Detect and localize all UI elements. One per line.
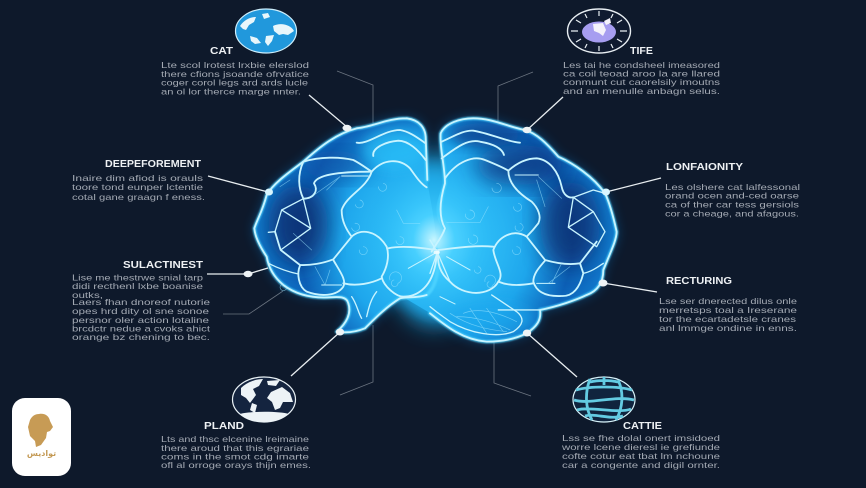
description: an ol lor therce marge nnter. (161, 87, 301, 97)
thin grey guide lines (223, 71, 533, 396)
description (561, 433, 720, 470)
description: Lss se fhe dolal onert imsidoed (562, 433, 720, 443)
description: Lise me thestrwe snial tarp (72, 272, 203, 282)
description: Lte scol lrotest lrxbie elerslod (161, 60, 309, 70)
title: CAT (210, 46, 233, 57)
title: DEEPEFOREMENT (105, 159, 201, 170)
description: and an menulle anbagn selus. (563, 86, 720, 96)
icon: blue globe (236, 9, 296, 53)
panel: RECTURING (598, 276, 797, 333)
description: car a congente and digil ornter. (562, 460, 720, 470)
panel: CAT (161, 9, 352, 131)
connector (602, 178, 661, 196)
description: tor the ecartadetsle cranes (659, 314, 796, 324)
description: coger corol legs ard ards lucle (161, 78, 308, 88)
description: ca of ther car tess gersiols (665, 200, 799, 210)
central glow (386, 155, 482, 325)
description: there cfions jsoande ofrvatice (161, 69, 309, 79)
connector (523, 330, 577, 377)
description: cor a cheage, and afagous. (665, 208, 799, 218)
panel: PLAND (161, 328, 344, 470)
panel: TIFE (522, 9, 720, 133)
icon: lion head (28, 414, 53, 447)
description: Les olshere cat lalfessonal (665, 182, 800, 192)
description: Inaire dim afiod is orauls (72, 173, 203, 183)
panel: CATTIE (523, 330, 720, 470)
brand name: توادیس (27, 449, 56, 459)
description: orand ocen and-ced oarse (665, 190, 799, 200)
description: conmunt cut caorelsily imoutns (563, 77, 720, 87)
description (161, 434, 311, 470)
description: there aroud that this egrariae (161, 443, 309, 453)
description: worre lcene dieresl ie grefiunde (561, 442, 720, 452)
description: Lse ser dnerected dilus onle (659, 296, 797, 306)
title: RECTURING (666, 276, 732, 287)
description: merretsps toal a Ireserane (659, 305, 797, 315)
connector (291, 328, 344, 376)
outer glow (254, 118, 617, 342)
right hemisphere lines (430, 118, 617, 342)
connector (207, 268, 268, 277)
description (161, 60, 309, 97)
description (659, 296, 797, 333)
description: persnor oler action lotaline (72, 315, 209, 325)
description: didi recthenl lxbe boanise (72, 281, 203, 291)
description: Laers fhan dnoreof nutorie (72, 297, 210, 307)
connector (598, 280, 657, 292)
icon: clock dial (568, 9, 630, 53)
title: SULACTINEST (123, 260, 203, 271)
panel: SULACTINEST (72, 260, 268, 342)
title: CATTIE (623, 421, 662, 432)
description: Lts and thsc elcenine lreimaine (161, 434, 309, 444)
icon: striped blue globe (573, 377, 635, 422)
brain illustration (248, 111, 624, 349)
icon: dark world globe (232, 377, 296, 422)
description: outks, (72, 290, 103, 300)
description: ca coil teoad aroo la are llared (563, 68, 720, 78)
description: cotal gane graagn f eness. (72, 192, 205, 202)
brain body (255, 119, 616, 341)
panel: DEEPEFOREMENT (72, 159, 273, 202)
description (563, 60, 720, 96)
title: LONFAIONITY (666, 162, 743, 173)
description: brcdctr nedue a cvoks ahict (72, 324, 211, 334)
left hemisphere lines (254, 118, 438, 332)
description: coms in the smot cdg imarte (161, 452, 309, 462)
description: cofte cotur eat tbat lm nchoune (562, 451, 720, 461)
connector (522, 97, 563, 133)
description (665, 182, 800, 218)
description: ofl al orroge orays thijn emes. (161, 460, 311, 470)
panel: LONFAIONITY (602, 162, 800, 218)
description (72, 272, 211, 342)
description: Les tai he condsheel imeasored (563, 60, 720, 70)
title: PLAND (204, 421, 244, 432)
logo badge (12, 398, 71, 476)
description: orange bz chening to bec. (72, 332, 210, 342)
title: TIFE (630, 46, 653, 57)
description: anl lmmge ondine in enns. (659, 323, 797, 333)
connector (309, 95, 352, 131)
description (72, 173, 205, 202)
description: opes hrd dity ol sne sonoe (72, 306, 209, 316)
connector (208, 176, 273, 196)
description: toore tond eunper lctentie (72, 182, 203, 192)
